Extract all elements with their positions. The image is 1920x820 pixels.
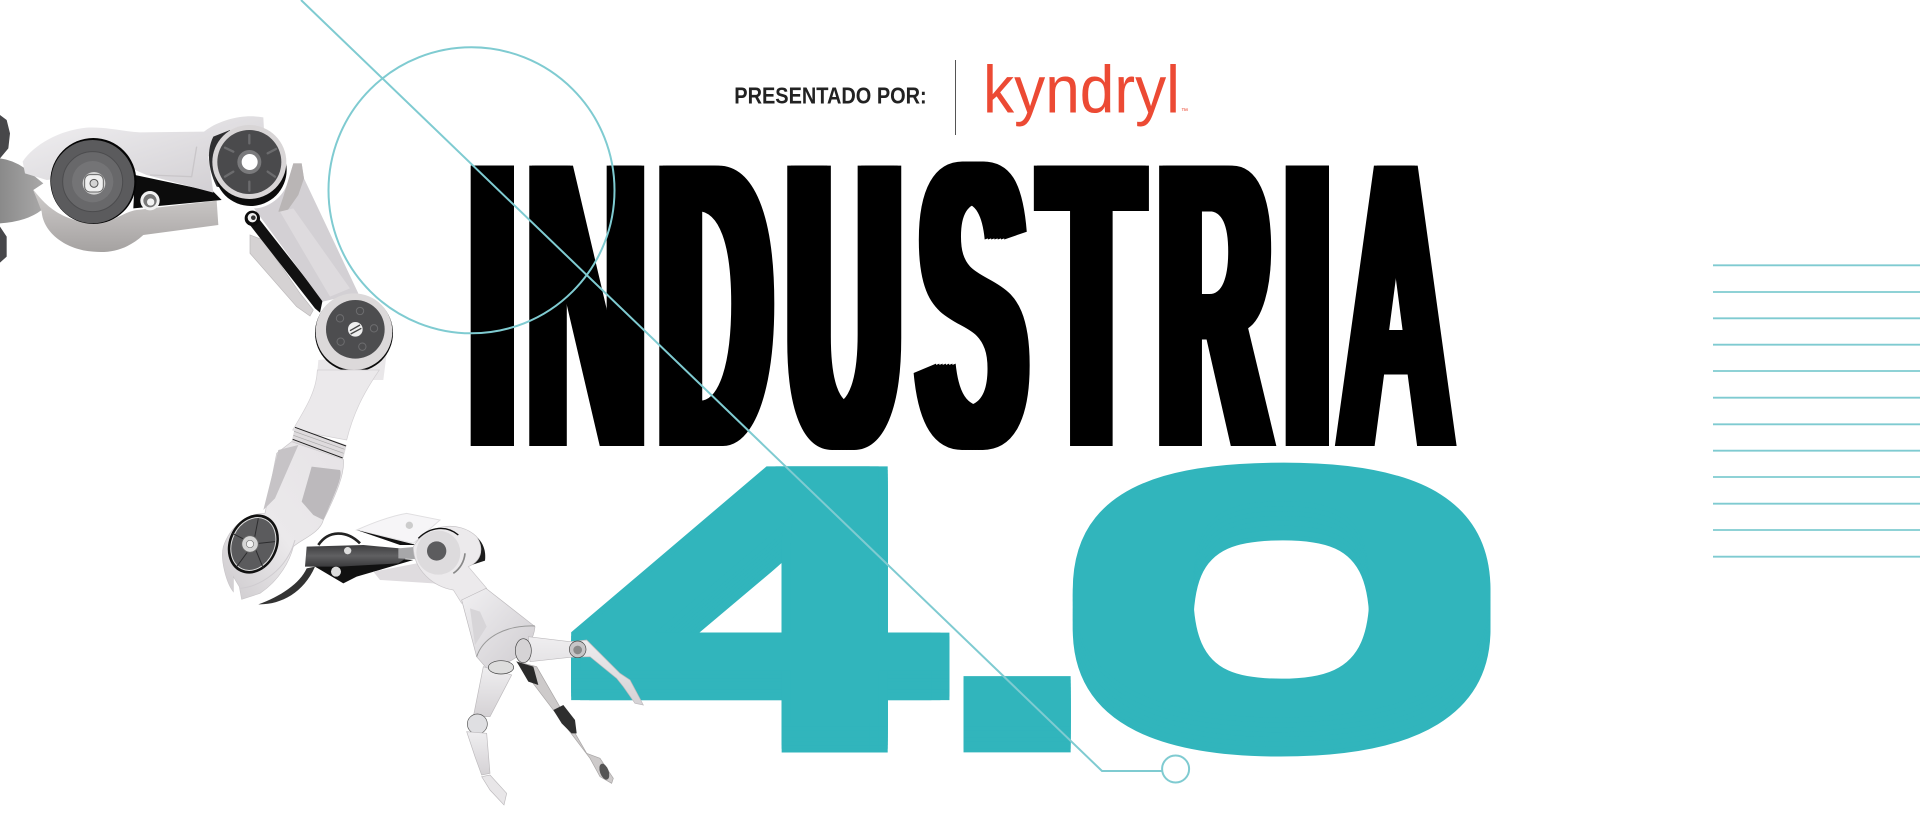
sponsor label: PRESENTADO POR: [734,82,927,108]
digit 0: 0 [1038,389,1526,791]
large circle [328,47,614,333]
letter I: I [451,78,533,533]
divider [955,60,956,135]
header: presented by [734,54,1188,135]
letter N: N [518,78,639,533]
letter T: T [1032,78,1131,533]
horizontal lines pattern [1713,265,1920,557]
small circle terminal [1162,756,1189,782]
arm: middle link [245,163,393,380]
arm: upper section [0,115,287,263]
letter U: U [778,78,889,533]
arm: forearm, wrist and hand [218,370,643,805]
logo: kyndryl: ™ [1181,108,1188,115]
decorative line with circle terminal [301,0,1189,782]
letter D: D [649,78,760,533]
decimal point: . [912,438,1123,790]
letter A: A [1331,78,1444,533]
robot arm illustration [0,115,643,805]
digit 4: 4 [570,386,944,803]
diagonal connector [301,0,1162,771]
logo: kyndryl: kyndryl [983,54,1180,128]
letter I: I [1266,78,1349,533]
letter S: S [909,78,1016,533]
letter R: R [1149,78,1258,533]
